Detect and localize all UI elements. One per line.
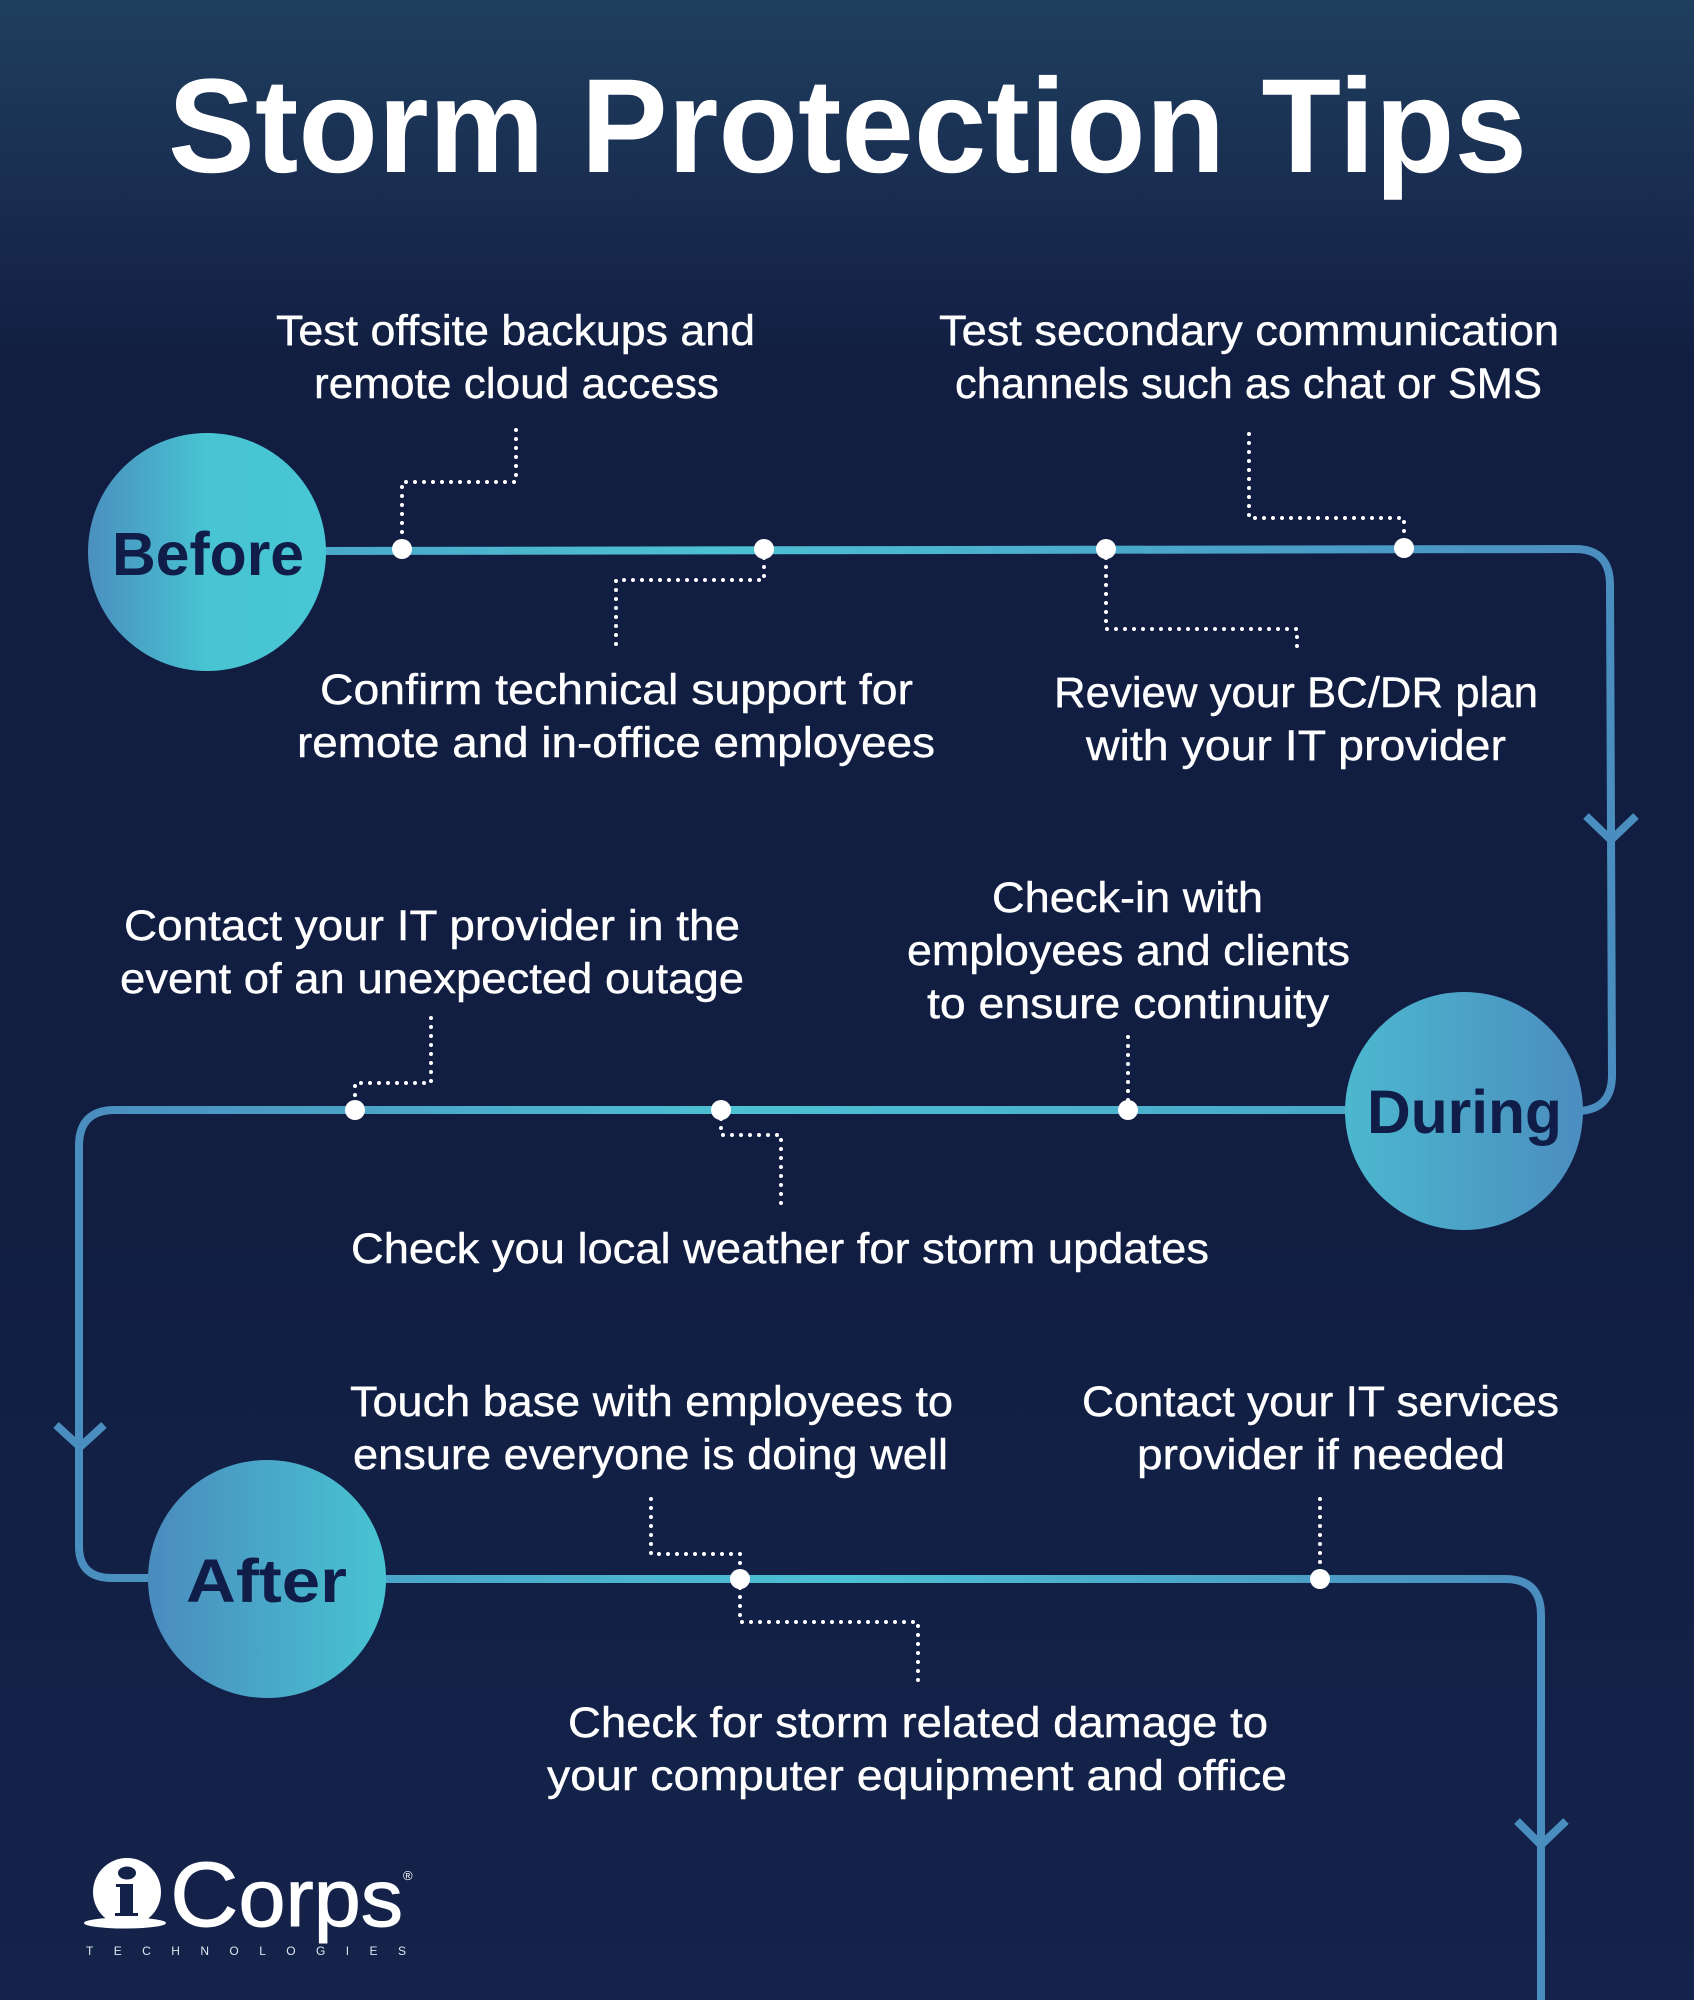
dotted leader: secondary communication bbox=[1249, 434, 1404, 549]
tip: touch base: ensure everyone is doing well bbox=[353, 1431, 948, 1479]
timeline dots bbox=[345, 538, 1414, 1589]
tip: BC/DR plan: Review your BC/DR plan bbox=[1054, 669, 1538, 717]
tip: BC/DR plan: with your IT provider bbox=[1085, 722, 1506, 770]
connector: before to during bbox=[320, 549, 1636, 1111]
tip: offsite backups bbox=[276, 307, 755, 408]
circle: During: During bbox=[1367, 1078, 1562, 1146]
circle: After bbox=[148, 1460, 386, 1698]
tip: check-in: Check-in with bbox=[992, 874, 1263, 922]
tip: contact IT provider: event of an unexpected outage bbox=[120, 955, 744, 1003]
tip: check-in: to ensure continuity bbox=[927, 980, 1330, 1028]
tip: IT services: Contact your IT services bbox=[1082, 1378, 1559, 1426]
tip: BC/DR plan bbox=[1054, 669, 1538, 770]
logo: iCorps Technologies: Corps bbox=[170, 1844, 403, 1946]
dotted leader: IT services bbox=[1318, 1499, 1322, 1579]
circle: Before: Before bbox=[112, 520, 304, 588]
tip: secondary communication: channels such as chat or SMS bbox=[955, 360, 1542, 408]
dotted leader: BC/DR plan bbox=[1106, 549, 1297, 650]
tip: contact IT provider: Contact your IT provider in the bbox=[124, 902, 740, 950]
dotted leader: offsite backups bbox=[402, 430, 516, 549]
dotted leader: touch base bbox=[651, 1499, 740, 1579]
tip: touch base bbox=[350, 1378, 953, 1479]
title: Storm Protection Tips bbox=[168, 52, 1527, 201]
tip: IT services: provider if needed bbox=[1137, 1431, 1505, 1479]
connector: during to after bbox=[56, 1110, 1360, 1578]
connector: after to next bbox=[370, 1579, 1566, 2000]
dotted leader: storm damage bbox=[740, 1579, 918, 1681]
tip: check-in bbox=[907, 874, 1350, 1028]
tip: storm damage bbox=[547, 1699, 1287, 1800]
tip: secondary communication bbox=[939, 307, 1559, 408]
tip: storm damage: Check for storm related damage to bbox=[568, 1699, 1268, 1747]
tip: contact IT provider bbox=[120, 902, 744, 1003]
tip: IT services bbox=[1082, 1378, 1559, 1479]
circle: Before bbox=[88, 433, 326, 671]
tip: technical support bbox=[297, 666, 935, 767]
tip: storm damage: your computer equipment and office bbox=[547, 1752, 1287, 1800]
tip: technical support: remote and in-office employees bbox=[297, 719, 935, 767]
tip: secondary communication: Test secondary communication bbox=[939, 307, 1559, 355]
dotted leader: check-in bbox=[1126, 1037, 1130, 1110]
tip: offsite backups: remote cloud access bbox=[314, 360, 719, 408]
tip: local weather: Check you local weather for storm updates bbox=[351, 1225, 1209, 1273]
dotted leader: contact IT provider bbox=[355, 1018, 431, 1110]
circle: During bbox=[1345, 992, 1583, 1230]
logo: iCorps Technologies: TECHNOLOGIES bbox=[86, 1944, 406, 1958]
tip: touch base: Touch base with employees to bbox=[350, 1378, 953, 1426]
tip: technical support: Confirm technical support for bbox=[320, 666, 913, 714]
dotted leader: local weather bbox=[721, 1110, 781, 1205]
tip: offsite backups: Test offsite backups and bbox=[276, 307, 755, 355]
circle: After: After bbox=[186, 1547, 347, 1615]
logo: iCorps Technologies: ® bbox=[403, 1868, 413, 1883]
dotted leader: technical support bbox=[616, 549, 764, 650]
logo: iCorps Technologies bbox=[84, 1844, 413, 1958]
tip: check-in: employees and clients bbox=[907, 927, 1350, 975]
